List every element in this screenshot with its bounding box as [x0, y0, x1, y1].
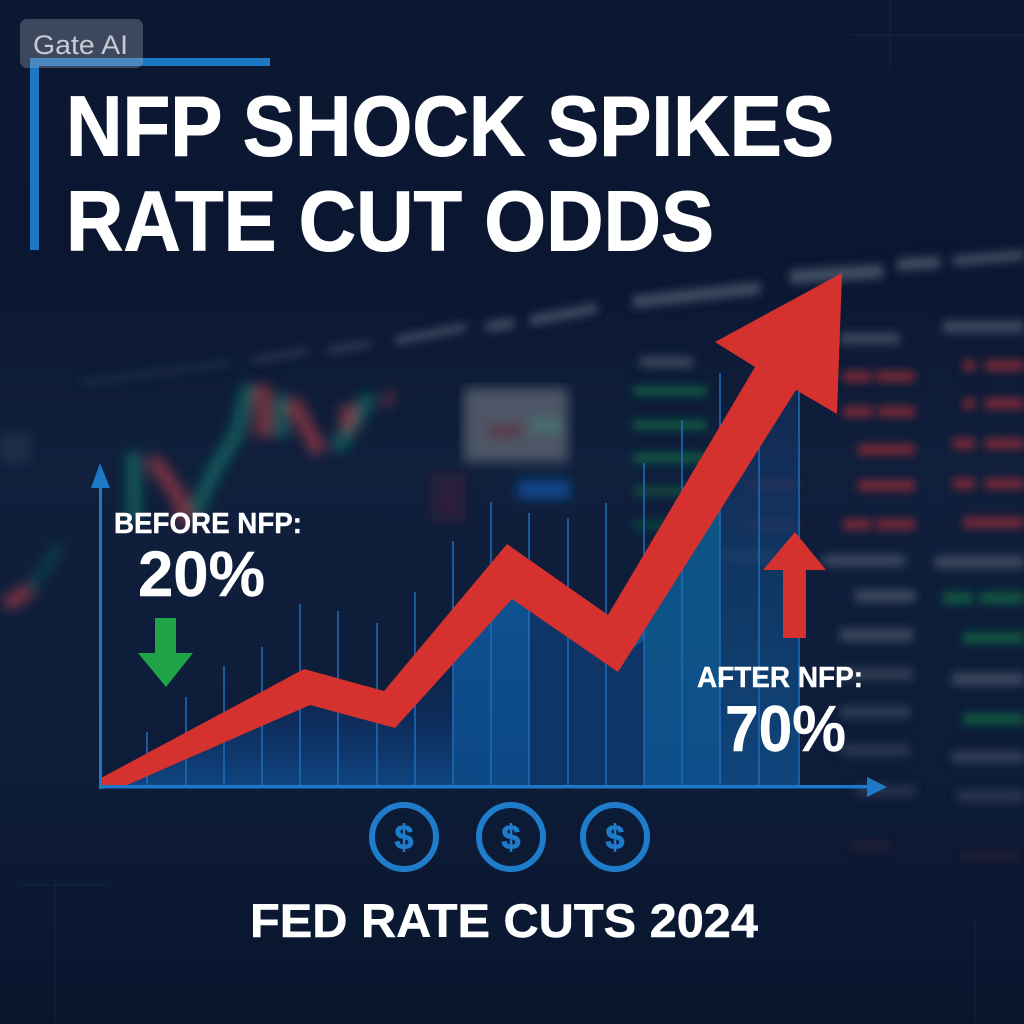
- chart area fill: [101, 390, 799, 785]
- icons: dollar coins: [372, 805, 647, 869]
- title bracket: [30, 58, 270, 250]
- title: [66, 80, 834, 270]
- after NFP label: [697, 662, 863, 765]
- title: RATE CUT ODDS: [66, 174, 714, 270]
- icon: green down arrow: [138, 618, 193, 687]
- icons: dollar coins: $: [502, 819, 521, 857]
- blurred header text: [80, 250, 1024, 386]
- before NFP label: 20%: [138, 538, 265, 610]
- watermark: Gate AI: Gate AI: [33, 30, 128, 60]
- blurred data table: [633, 321, 1024, 862]
- before NFP label: BEFORE NFP:: [114, 508, 302, 540]
- red rising arrow: [101, 273, 842, 785]
- chart axes: [91, 463, 887, 797]
- blurred candlestick chart: [0, 385, 466, 605]
- footer title: FED RATE CUTS 2024: [250, 894, 758, 947]
- blurred panel widget: [464, 388, 570, 499]
- icon: red up arrow: [763, 532, 826, 638]
- watermark: Gate AI: [20, 19, 143, 68]
- title: NFP SHOCK SPIKES: [66, 80, 834, 174]
- after NFP label: 70%: [725, 692, 846, 765]
- icons: dollar coins: $: [606, 819, 625, 857]
- icons: dollar coins: $: [395, 819, 414, 857]
- before NFP label: [114, 508, 302, 610]
- chart grid lines: [147, 373, 799, 785]
- after NFP label: AFTER NFP:: [697, 662, 863, 694]
